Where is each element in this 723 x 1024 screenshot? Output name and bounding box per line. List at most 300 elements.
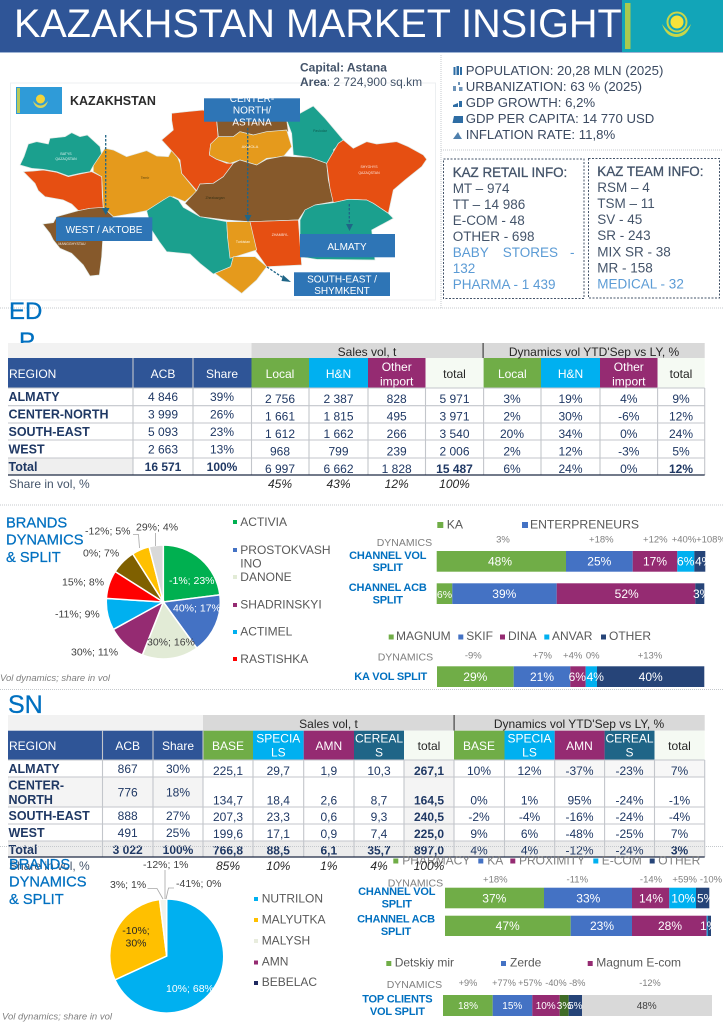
bar: channel vol: 25% [587,555,612,569]
table header bands: import [612,374,646,388]
table header bands: H&N [326,367,351,381]
table rows: 12% [669,462,693,476]
table rows: -4% [519,810,540,824]
retail info panel: OTHER - 698 [453,229,534,244]
dynamics row [388,875,723,890]
table rows: 100% [207,460,238,474]
heading: brands dynamics ED [6,516,84,566]
heading: SN: SN [8,691,43,719]
retail info panel: 132 [453,261,475,276]
table rows: 18,4 [267,793,290,807]
table rows: 4% [470,844,488,858]
table header bands: import [380,374,414,388]
table rows: 100% [163,843,194,857]
pie chart: ED brands: 0%; 7% [83,547,119,559]
dynamics row: -40% [545,978,567,988]
label: channel acb split: SPLIT [381,926,412,938]
table rows: 9% [470,827,488,841]
bar: channel acb: 6% [437,589,452,601]
pie chart: ED brands [55,521,221,659]
legend: ED key accounts: OTHER [609,629,651,643]
bar chart: SN top clients [362,978,712,1018]
indicator lines: POPULATION: 20,28 MLN (2025) [466,63,663,78]
table rows: 266 [387,427,407,441]
region names on map: Temir [141,176,150,180]
table rows: 239 [387,444,407,458]
table rows: 15 487 [436,462,473,476]
team info panel: TSM – 11 [597,196,655,211]
dynamics row [378,650,663,663]
table rows: 240,5 [414,810,444,824]
table rows: 3 540 [439,427,470,441]
pie chart: SN brands: 30% [125,938,147,950]
retail info panel [444,159,584,298]
table header bands: BASE [212,739,244,753]
share in volume row: Share in vol, % [9,477,90,491]
table rows: -24% [615,810,644,824]
bar: ka vol: 40% [639,670,663,684]
heading: brands dynamics SN: BRANDS [9,857,70,873]
dynamics row: +4% [563,650,583,661]
table rows: 23,3 [267,810,290,824]
table header bands: Share [162,739,194,753]
retail info panel: - [570,245,574,260]
table rows: 7,4 [371,827,388,841]
table rows: 1% [521,793,539,807]
label: west [56,217,152,241]
table rows: 25% [166,826,190,840]
table header bands: Sales vol, t [338,345,397,359]
share in volume row: SN: 1% [320,859,338,873]
heading: ED [9,298,42,355]
share in volume row: SN: 10% [266,859,291,873]
label: center-north [204,94,300,128]
table rows: 13% [210,442,234,456]
table header bands: SPECIA [507,732,552,746]
table rows: 6,1 [320,844,337,858]
retail info panel: MT – 974 [453,181,510,196]
icon: inflation [453,132,462,139]
table header bands: Other [614,360,644,374]
heading: ED: ED [9,298,42,325]
legend: SN channels: KA [487,853,503,867]
table rows: 9,3 [371,810,388,824]
heading: ED: P [19,328,35,355]
heading: brands dynamics SN: & SPLIT [9,892,64,908]
table rows: 3 022 [113,843,143,857]
table rows: 7% [671,764,689,778]
bar: channel acb: 1% [700,919,718,933]
legend: ED key accounts [389,629,651,643]
legend: SN top clients [386,956,681,970]
dynamics row: +59% [672,875,698,886]
legend: SN brands [254,891,325,989]
table rows: 27% [166,809,190,823]
dynamics row: +7% [533,650,552,661]
dynamics row: -8% [569,978,585,988]
team info panel: SV - 45 [597,212,642,227]
pie chart: SN brands: -10%; [122,925,150,937]
map panel [10,83,436,300]
table header bands: total [668,739,691,753]
label: channel vol split [349,550,427,574]
table rows: 0% [470,793,488,807]
legend: SN top clients: Magnum E-com [596,956,681,970]
dynamics row: -11% [567,875,589,886]
legend: ED brands: INO [240,557,262,571]
table header bands: total [443,367,466,381]
dynamics row: 0% [586,650,600,661]
bar: top clients [443,995,712,1016]
table rows: 26% [210,408,234,422]
legend: ED key accounts: DINA [508,629,537,643]
table rows: NORTH [8,793,53,807]
table rows: -6% [618,410,640,424]
dynamics row: -10% [700,875,723,886]
table rows: 828 [387,392,407,406]
table rows: -16% [565,810,594,824]
bar: channel acb: 47% [496,919,520,933]
bar: ka vol: 6% [569,670,586,684]
bar: top clients: 15% [502,1001,522,1012]
table rows: 2 756 [265,392,295,406]
title: KAZAKHSTAN MARKET INSIGHTS [14,2,648,46]
legend: ED brands: ACTIVIA [240,515,287,529]
table header bands: Share [206,367,238,381]
table rows: -4% [669,810,690,824]
pie chart: ED brands: 29%; 4% [136,521,178,533]
table rows: 10,3 [367,764,391,778]
bar chart: SN channel split [357,875,723,938]
table header bands: S [625,746,634,760]
table: SN sales by region [8,715,705,858]
legend: SN brands: AMN [262,955,288,969]
dynamics row: +18% [483,875,508,886]
table rows: 10% [467,764,491,778]
heading: brands dynamics ED: & SPLIT [6,550,61,566]
table header bands: Sales vol, t [299,717,359,731]
table header bands: BASE [463,739,495,753]
bar: top clients: 48% [637,1001,657,1012]
table rows: 6 997 [265,462,295,476]
table rows: 39% [210,390,234,404]
table rows: 968 [270,444,290,458]
bar: channel vol: 4% [695,555,713,569]
table rows: 17,1 [267,827,290,841]
pie chart: ED brands: 15%; 8% [62,576,104,588]
retail info panel: BABY [453,245,489,260]
legend: SN channels: PROXIMITY [519,853,585,867]
dynamics row: -12% [639,978,661,988]
label: channel vol split: CHANNEL VOL [349,550,427,562]
indicator lines: INFLATION RATE: 11,8% [466,127,615,142]
team info panel: KAZ TEAM INFO: [597,164,703,179]
table rows: 18% [166,786,190,800]
share in volume row: 12% [385,477,409,491]
legend: ED channels: ENTERPRENEURS [530,517,639,531]
table rows: 2,6 [320,793,337,807]
bar: ka vol: 21% [530,670,554,684]
table rows: 1,9 [320,764,337,778]
pie chart: ED brands: -12%; 5% [85,525,131,537]
table rows: 888 [118,809,138,823]
bar: channel acb: 28% [658,919,682,933]
label: channel acb split: CHANNEL ACB [349,582,427,594]
legend: SN channels: OTHER [658,853,701,867]
dynamics row: -14% [640,875,663,886]
label: center-north: ASTANA [232,118,272,128]
share in volume row: SN: 100% [414,859,445,873]
table header bands: H&N [558,367,583,381]
bar: top clients: 18% [458,1001,478,1012]
table header bands: REGION [9,367,56,381]
table header bands: ACB [115,739,140,753]
legend: ED key accounts: MAGNUM [396,629,451,643]
label: south-east: SOUTH-EAST / [307,274,377,286]
label: channel acb split [357,914,435,938]
dynamics row: DYNAMICS [378,651,433,663]
label: channel acb split: CHANNEL ACB [357,914,435,926]
pie chart: ED brands: -11%; 9% [55,609,100,621]
capital and area: Capital: Astana [300,60,387,74]
share in volume row: SN: 85% [216,859,240,873]
dynamics row: +12% [643,534,668,545]
share in volume row: SN: 4% [370,859,388,873]
dynamics row: +18% [589,534,614,545]
bar: ka vol [437,666,704,687]
label: center-north: CENTER- [230,94,274,105]
map label: KAZAKHSTAN [70,94,156,108]
bar: channel vol: 6% [677,555,695,569]
table rows: 23% [210,425,234,439]
table rows: 1 815 [323,410,354,424]
bar chart: ED channel split [349,534,723,606]
table header bands: Dynamics vol YTD'Sep vs LY, % [494,717,665,731]
dynamics row: 3% [496,534,510,545]
legend: ED channels: KA [447,517,464,531]
pie chart: ED brands: -1%; 23% [169,575,215,587]
bar: channel vol [437,551,713,572]
label: top clients vol split: TOP CLIENTS [362,994,432,1006]
share in volume row [9,477,470,491]
bar: channel vol: 17% [643,555,667,569]
macro indicators [452,63,663,142]
team info panel: SR - 243 [597,228,651,243]
bar: top clients: 5% [568,1001,583,1012]
indicator lines: GDP PER CAPITA: 14 770 USD [466,111,654,126]
table rows: -37% [565,764,594,778]
table rows: -25% [615,827,644,841]
table rows: 19% [558,392,583,406]
legend: SN brands: BEBELAC [262,975,317,989]
dynamics row: +13% [638,650,663,661]
team info panel: MR - 158 [597,260,653,276]
pie chart: ED brands: 40%; 17% [173,603,221,615]
bar: top clients: 3% [557,1001,571,1012]
table rows: -48% [565,827,594,841]
table header bands [8,343,705,475]
label: channel vol split: SPLIT [373,562,403,574]
heading: brands dynamics ED: DYNAMICS [6,532,84,548]
bar: channel vol: 48% [488,555,512,569]
legend: ED brands: SHADRINSKYI [240,598,322,612]
table rows: 134,7 [213,793,243,807]
icon: population [454,66,462,75]
table header bands: Dynamics vol YTD'Sep vs LY, % [509,345,680,359]
table header bands [8,715,705,857]
table rows: 0% [620,427,638,441]
table grid [8,358,705,475]
legend: SN channels [393,853,701,867]
table rows: 199,6 [213,827,243,841]
table rows: 1 612 [265,427,295,441]
table rows: 0,6 [320,810,337,824]
indicator lines: URBANIZATION: 63 % (2025) [466,79,642,94]
retail info panel: E-COM - 48 [453,213,525,228]
table rows: 9% [672,392,690,406]
table rows: CENTER-NORTH [8,408,108,422]
region names on map: SHYGHYS [360,165,378,169]
dynamics row: +57% [518,978,542,988]
team info panel: RSM – 4 [597,180,650,195]
table rows: 6 662 [323,462,354,476]
table rows: 2 663 [148,442,178,456]
bar chart: ED key accounts split [354,650,704,687]
label: center-north: NORTH/ [233,106,271,116]
table rows: 1 662 [323,427,354,441]
table rows: SOUTH-EAST [8,425,90,439]
region names on map: Zhezkazgan [205,196,225,200]
label: almaty [300,234,395,257]
table rows: 30% [558,410,583,424]
table rows: 776 [118,786,138,800]
bar: channel vol: 10% [671,891,696,905]
table rows: 3 971 [439,410,470,424]
table rows: 20% [500,427,524,441]
table rows: 491 [118,826,138,840]
region names on map: MANGGHYSTAU [58,242,86,246]
retail info panel: KAZ RETAIL INFO: [453,165,567,180]
table rows: 88,5 [267,844,290,858]
legend: SN brands: MALYSH [262,933,310,947]
label: channel vol split [358,886,436,910]
note: SN pie: Vol dynamics; share in vol [2,1011,113,1022]
legend: ED brands: ACTIMEL [240,625,293,639]
dotted line across SN table [0,846,723,848]
table header bands: Local [266,367,294,381]
legend: SN top clients: Zerde [510,956,542,970]
dynamics row: DYNAMICS [388,878,443,890]
label: top clients vol split [362,994,432,1018]
flag of Kazakhstan [622,0,723,52]
bar: channel acb: 3% [693,587,711,601]
table rows: 799 [328,444,349,458]
table rows: 6% [503,462,521,476]
label: channel vol split: CHANNEL VOL [358,886,436,898]
label: top clients vol split: VOL SPLIT [370,1006,425,1018]
table rows: 6% [521,827,539,841]
pie chart: SN brands: 3%; 1% [110,879,146,891]
heading: brands dynamics SN [9,857,87,908]
bar: ka vol: 4% [587,670,604,684]
note: ED pie: Vol dynamics; share in vol [0,673,111,684]
table rows: 35,7 [367,844,391,858]
label: channel acb split [349,582,427,606]
table rows: 225,0 [414,827,444,841]
table rows: 16 571 [145,460,182,474]
table rows: 12% [517,764,542,778]
pie chart: SN brands: -12%; 1% [143,859,189,871]
table rows: 867 [118,762,138,776]
legend: SN brands: MALYUTKA [262,912,325,926]
region names on map: ZHAMBYL [272,233,288,237]
retail info panel: STORES [503,245,558,260]
bar: channel vol: 33% [576,891,601,905]
share in volume row: SN [9,859,445,873]
table rows: 1 828 [382,462,412,476]
icon: small flag [16,87,62,114]
table rows: 5 971 [439,392,470,406]
region names on map [55,129,380,246]
table rows: 12% [669,410,693,424]
bar: channel vol: 37% [482,891,507,905]
table header bands: CEREAL [355,732,403,746]
bar: channel acb [437,583,711,604]
table rows [8,762,690,858]
pie chart: SN brands: -41%; 0% [176,878,222,890]
table header bands: CEREAL [605,732,654,746]
heading: brands dynamics SN: DYNAMICS [9,875,87,891]
table rows: ALMATY [8,390,60,404]
capital and area: Area: 2 724,900 sq.km [300,75,422,89]
table rows: -2% [468,810,490,824]
legend: ED key accounts: SKIF [466,629,493,643]
indicator lines: GDP GROWTH: 6,2% [466,95,595,110]
table rows: 34% [558,427,583,441]
table: ED sales by region [8,343,705,491]
share in volume row: 43% [326,477,351,491]
table rows: 0% [620,462,638,476]
table rows: 897,0 [414,844,444,858]
dynamics row: +40% [672,534,697,545]
table header bands: AMN [566,739,593,753]
bar: channel vol [445,888,715,908]
table rows: 29,7 [267,764,290,778]
legend: ED brands: PROSTOKVASH [240,543,331,557]
label: channel acb split: SPLIT [373,594,403,606]
pie chart: SN brands: 10%; 68% [166,983,214,995]
bar: channel acb [445,916,718,936]
table rows: 0,9 [320,827,337,841]
table header bands: Local [498,367,527,381]
arrows on map [106,128,349,279]
table rows: 12% [558,444,583,458]
region names on map: BATYS [60,152,72,156]
table header bands: REGION [9,739,56,753]
table rows: 3 999 [148,408,178,422]
legend: SN brands: NUTRILON [262,891,323,905]
table rows: 766,8 [213,844,243,858]
heading: brands dynamics ED: BRANDS [6,516,67,532]
table rows: 2 006 [439,444,470,458]
legend: SN channels: PHARMACY [402,853,470,867]
table rows: -12% [565,844,594,858]
table rows: -24% [615,844,644,858]
retail info panel: PHARMA - 1 439 [453,277,555,292]
table rows: 3% [503,392,521,406]
dynamics row: +9% [459,978,477,988]
team info panel: MEDICAL - 32 [597,276,684,292]
